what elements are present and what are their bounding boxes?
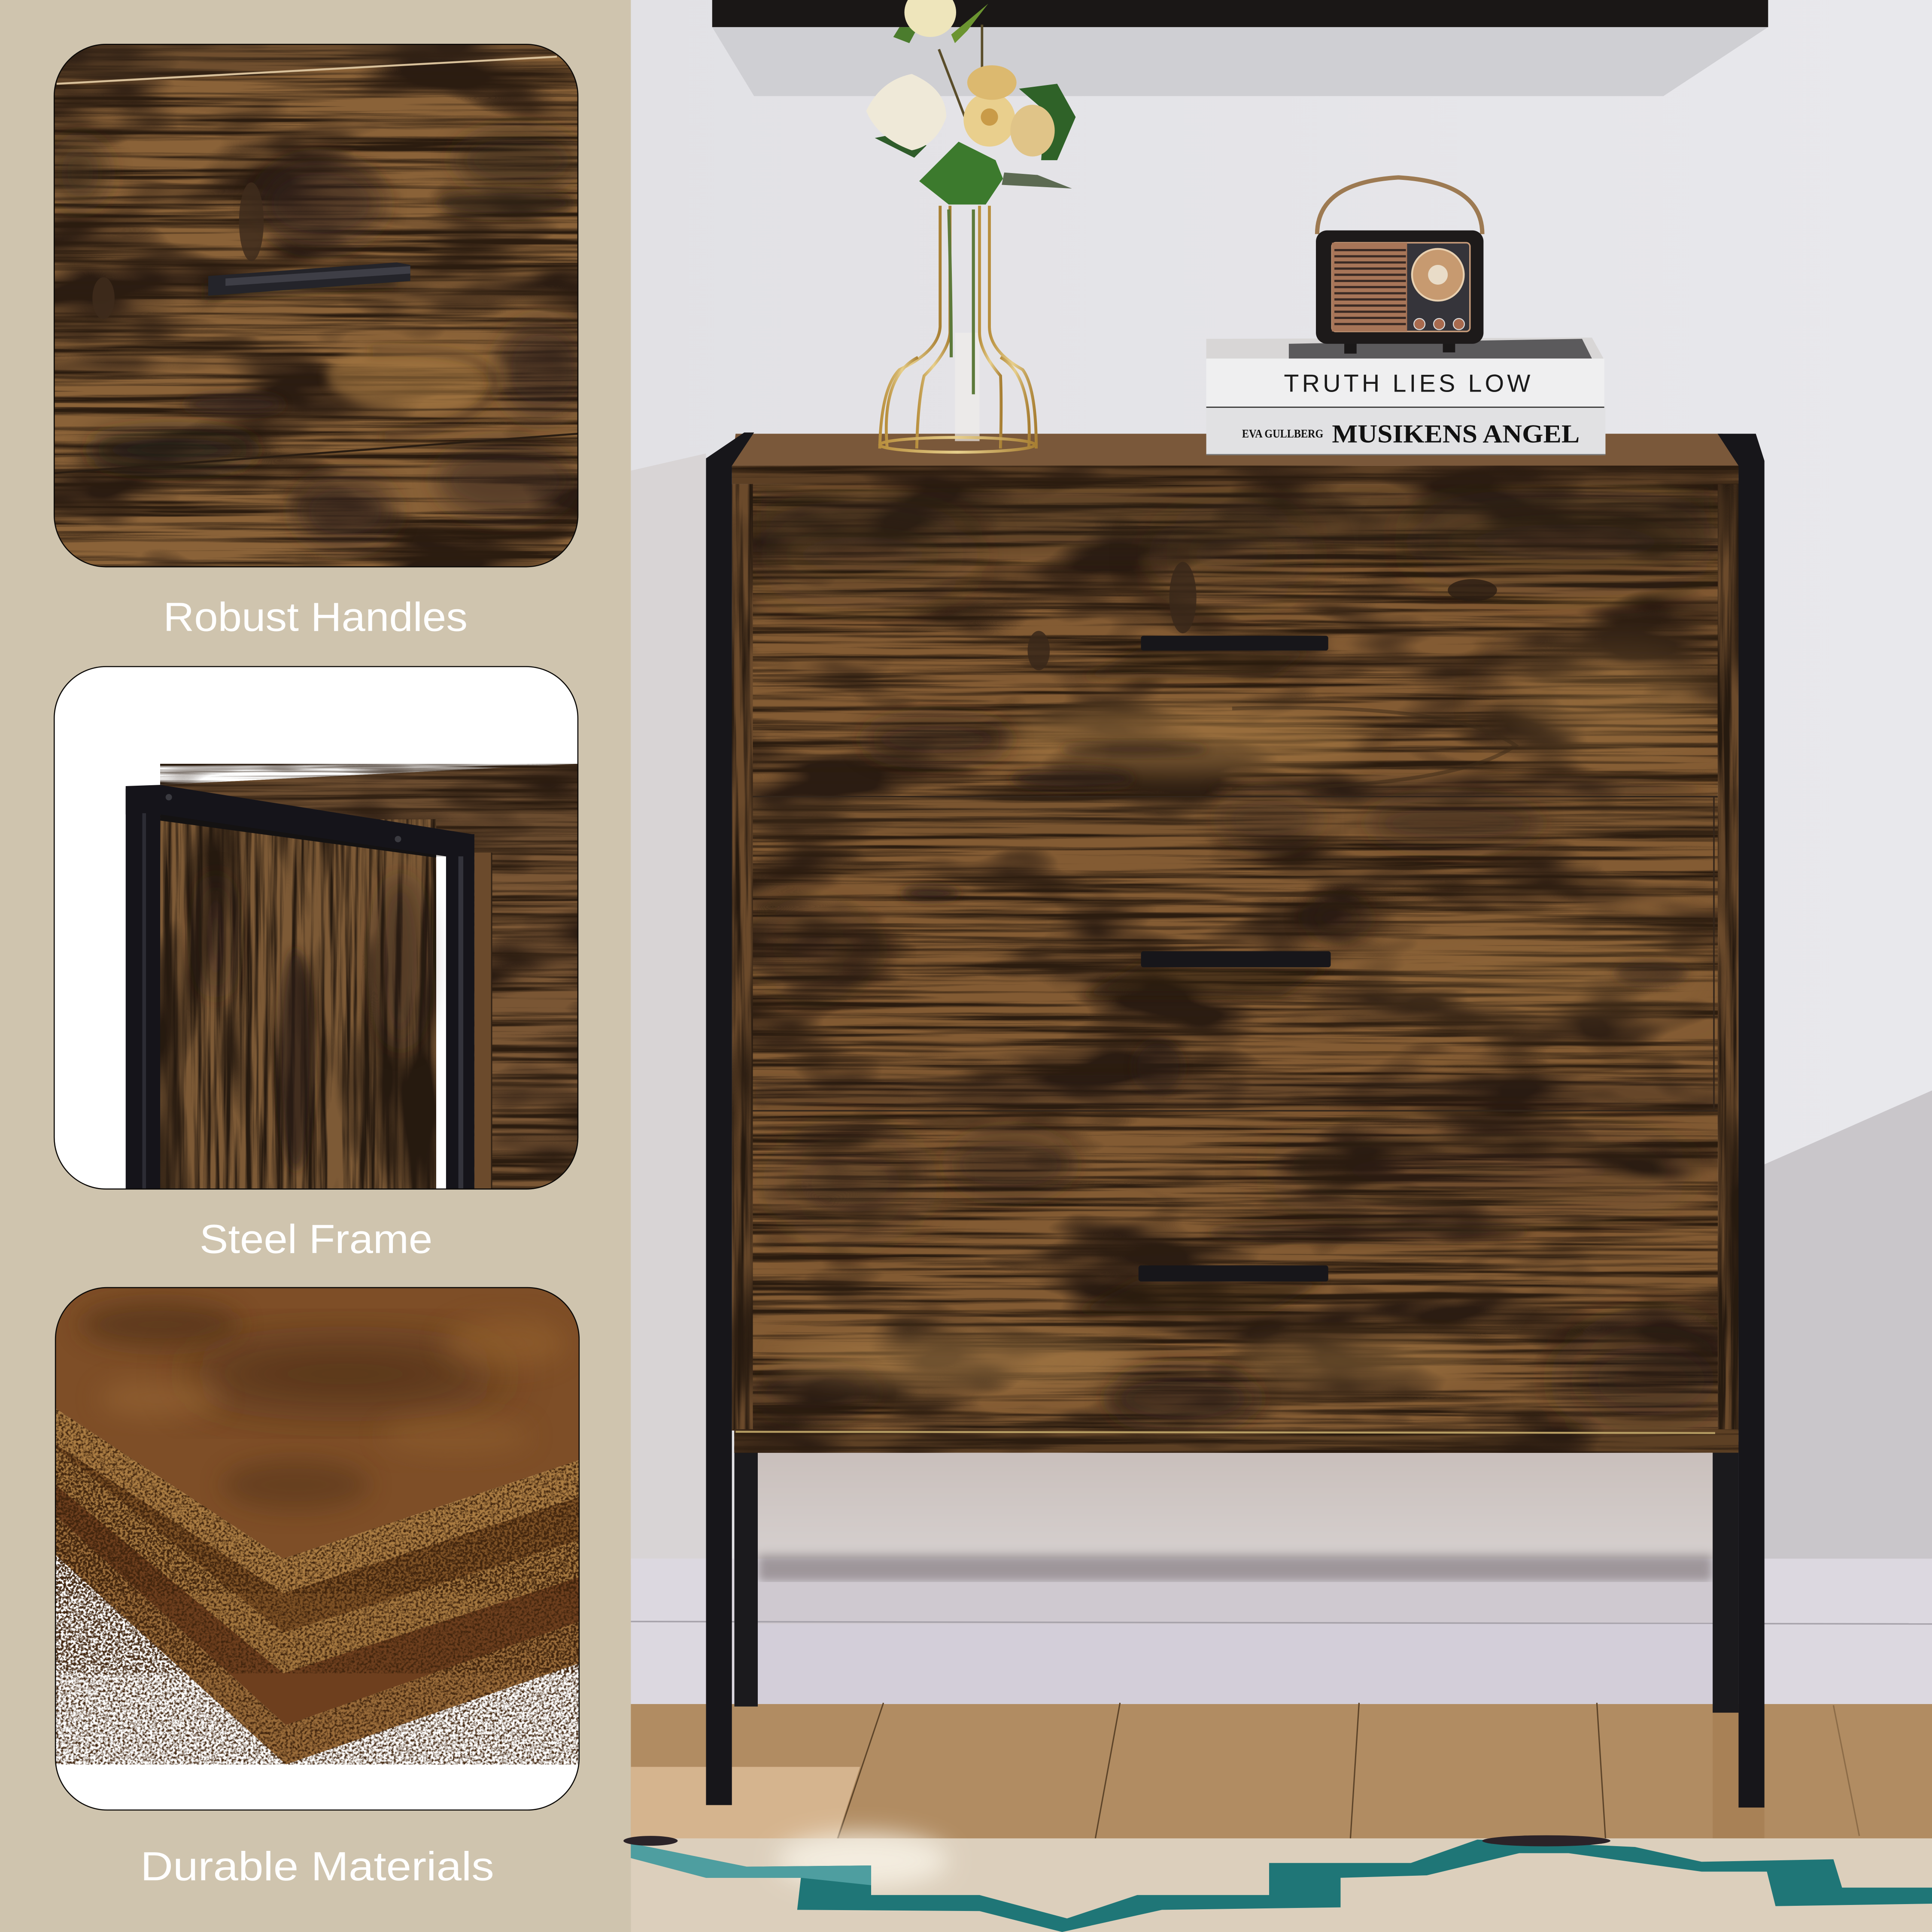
top bud [905,0,956,37]
panel: durable materials close-up [55,1288,579,1810]
top drawer handle [1082,636,1328,677]
stacked books [1206,337,1605,455]
panel: robust handles close-up [53,44,585,567]
book title: musikens angel: MUSIKENS ANGEL [1332,419,1580,448]
dresser front panel [160,795,436,1189]
yellow roses [963,65,1055,156]
right black post [1718,434,1765,1807]
room background: wall [631,0,1932,1565]
vase with flowers [866,0,1075,452]
dresser [706,432,1765,1807]
drawer fronts [752,484,1738,1435]
radio speaker grill [1332,243,1407,331]
bottom board [55,1444,579,1765]
gold wire vase [880,206,1036,452]
top front band and side frames [732,466,1738,1431]
heading: steel frame: Steel Frame [200,1217,432,1262]
wall shelf and shadow [712,0,1768,96]
bottom rail [734,1429,1738,1453]
steel frame [126,785,474,1189]
left beige sidebar [0,0,631,1932]
white rose [866,74,946,150]
leaves [875,4,1075,204]
left black post [706,432,754,1805]
stems [939,24,982,123]
middle drawer handle [1082,951,1331,996]
top surface [732,434,1738,466]
radio dial [1412,249,1464,301]
icon: drawer handle close-up [204,262,410,301]
bottom book [1206,407,1605,455]
patterned rug [623,1833,1932,1932]
radio knobs [1414,319,1464,330]
heading: durable materials: Durable Materials [140,1844,494,1889]
dresser top surface [160,764,578,857]
bottom drawer handle [1078,1265,1328,1311]
middle board [55,1444,579,1673]
baseboard [631,1555,1932,1704]
inner back legs [734,1442,1738,1713]
book author: EVA GULLBERG [1242,427,1323,440]
dresser side face [474,853,578,1189]
panel: steel frame close-up [54,667,578,1189]
retro radio [1316,177,1483,354]
top board [55,1288,579,1593]
book title: truth lies low: TRUTH LIES LOW [1284,370,1530,398]
wooden floor [631,1703,1932,1842]
top book [1206,337,1604,407]
heading: robust handles: Robust Handles [163,594,468,640]
